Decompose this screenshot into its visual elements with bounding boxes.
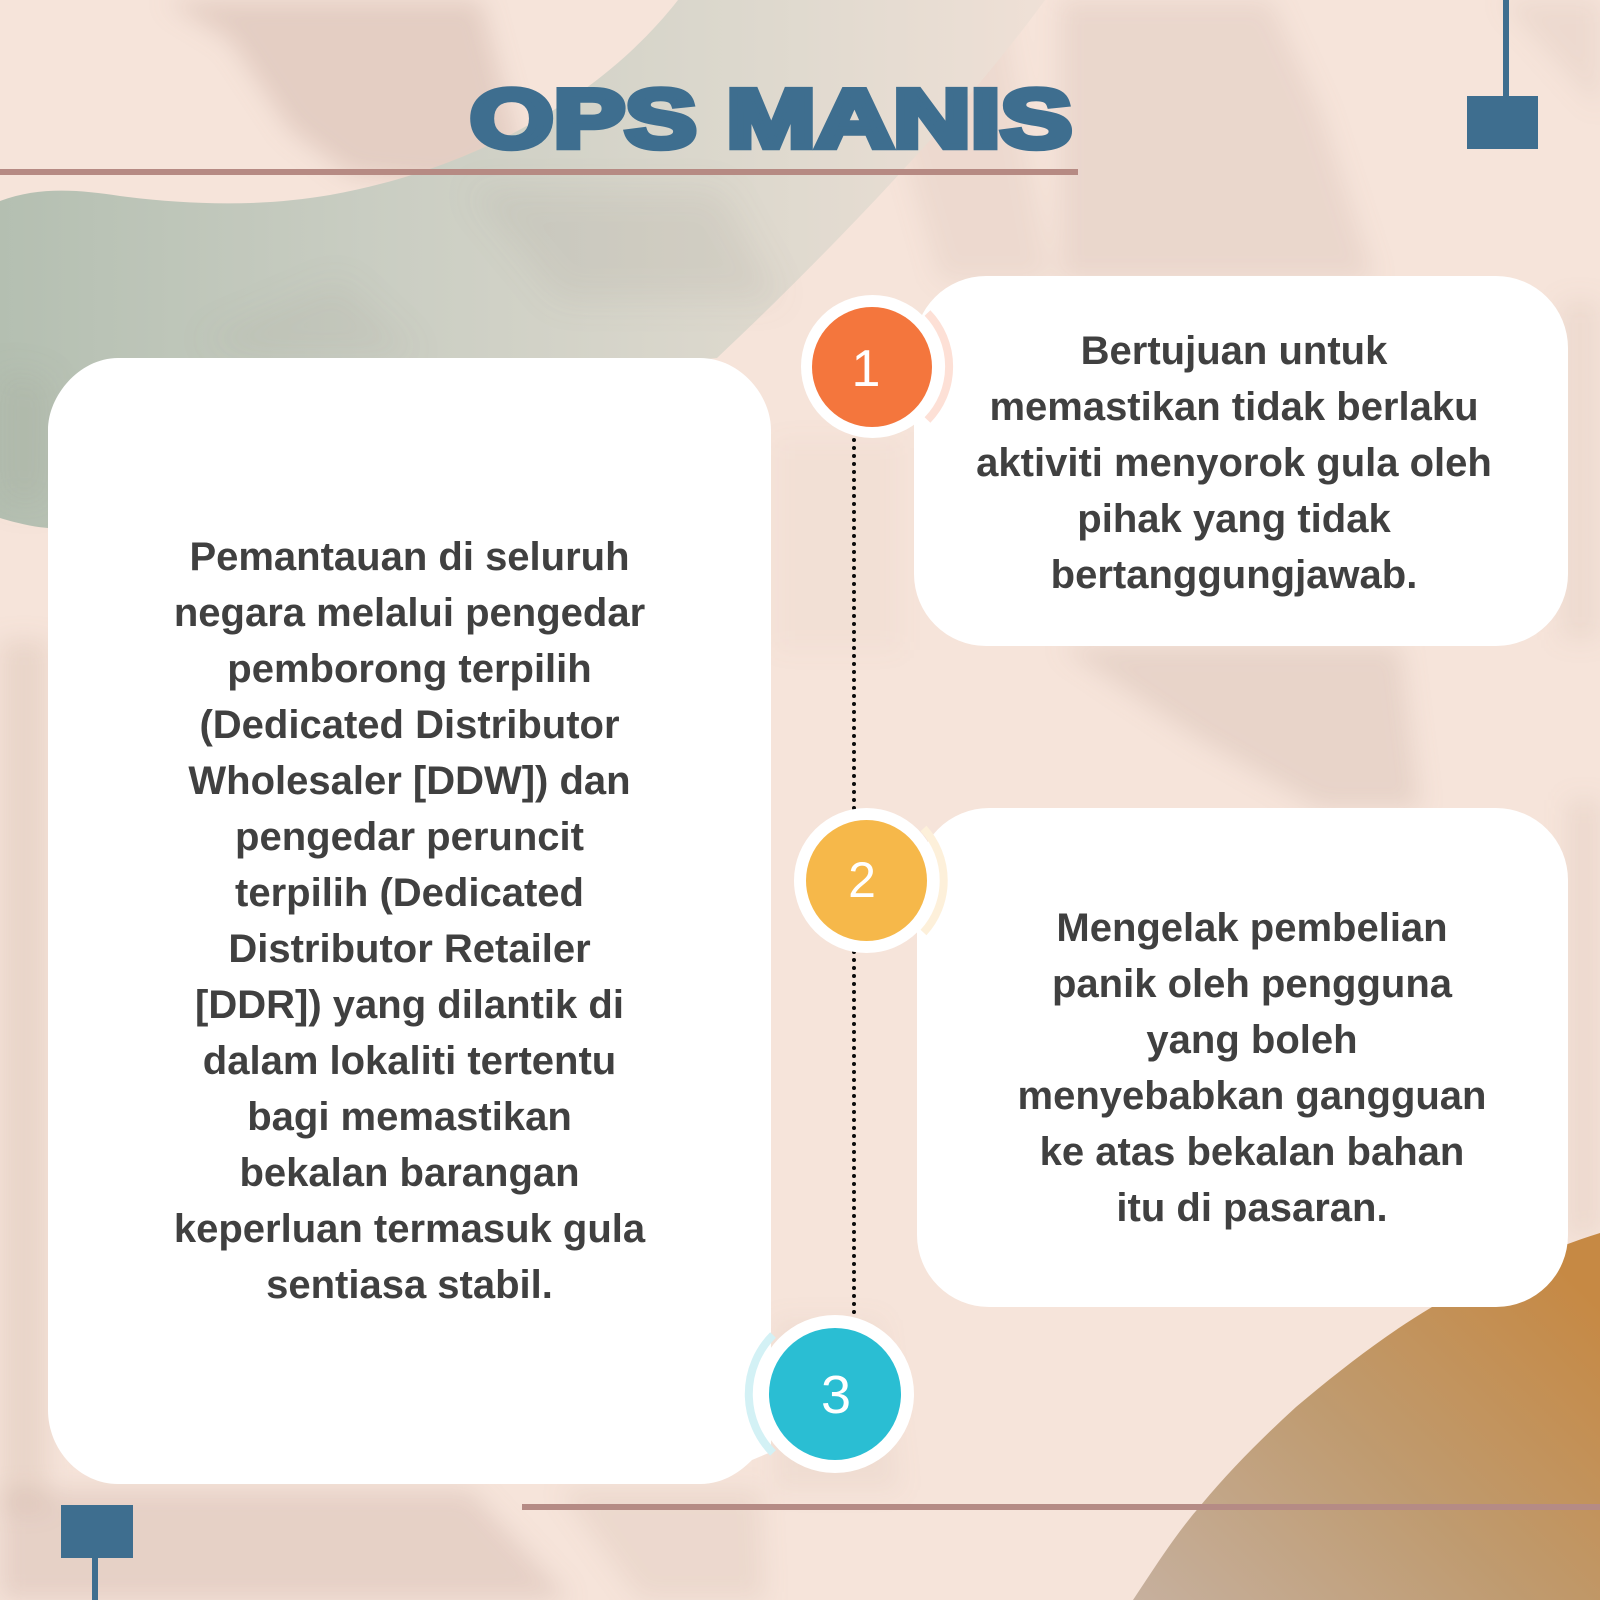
left card text: bekalan barangan xyxy=(239,1151,580,1195)
card 1 text: Bertujuan untuk xyxy=(1081,329,1388,373)
left card text: Pemantauan di seluruh xyxy=(189,535,630,579)
green organic shape xyxy=(0,0,1045,528)
left card text: keperluan termasuk gula xyxy=(174,1207,646,1251)
card 2 text xyxy=(1018,906,1486,1230)
card 1 text: memastikan tidak berlaku xyxy=(989,385,1479,429)
brown organic shape xyxy=(1133,1233,1600,1600)
badge 2: 2 xyxy=(848,852,876,908)
badge 3 xyxy=(749,1315,914,1473)
card 1 text: aktiviti menyorok gula oleh xyxy=(976,441,1492,485)
top rule xyxy=(0,169,1078,175)
card 1 text: pihak yang tidak xyxy=(1077,497,1391,541)
badge 3: 3 xyxy=(821,1365,851,1425)
card 2 text: yang boleh xyxy=(1146,1018,1358,1062)
left card text: pemborong terpilih xyxy=(227,647,592,691)
card 2 text: Mengelak pembelian xyxy=(1056,906,1448,950)
left card text: Distributor Retailer xyxy=(228,927,591,971)
bottom rule xyxy=(522,1504,1600,1510)
left card text: bagi memastikan xyxy=(247,1095,572,1139)
card 1 text: bertanggungjawab. xyxy=(1051,553,1417,597)
badge 1 xyxy=(801,295,949,438)
title: OPS MANIS xyxy=(470,72,1072,165)
card 2 text: menyebabkan gangguan xyxy=(1018,1074,1486,1118)
bottom left marker xyxy=(61,1505,133,1600)
left card text: dalam lokaliti tertentu xyxy=(203,1039,616,1083)
badge 2 xyxy=(794,808,944,953)
left card text: [DDR]) yang dilantik di xyxy=(195,983,624,1027)
left card text: terpilih (Dedicated xyxy=(235,871,584,915)
card 2 text: panik oleh pengguna xyxy=(1052,962,1453,1006)
panel: card 1 xyxy=(914,276,1568,646)
panel: card 2 xyxy=(917,808,1568,1307)
card 2 text: ke atas bekalan bahan xyxy=(1040,1130,1464,1174)
left card text: sentiasa stabil. xyxy=(266,1263,553,1307)
left card text: pengedar peruncit xyxy=(235,815,584,859)
card 2 text: itu di pasaran. xyxy=(1116,1186,1388,1230)
card 1 text xyxy=(976,329,1492,597)
top right marker xyxy=(1467,0,1538,149)
dotted timeline xyxy=(852,440,856,1318)
left card text: (Dedicated Distributor xyxy=(199,703,620,747)
badge 1: 1 xyxy=(852,340,880,398)
left card text: Wholesaler [DDW]) dan xyxy=(188,759,631,803)
left card text: negara melalui pengedar xyxy=(174,591,645,635)
left card text xyxy=(174,535,646,1307)
panel: left card xyxy=(48,358,771,1484)
